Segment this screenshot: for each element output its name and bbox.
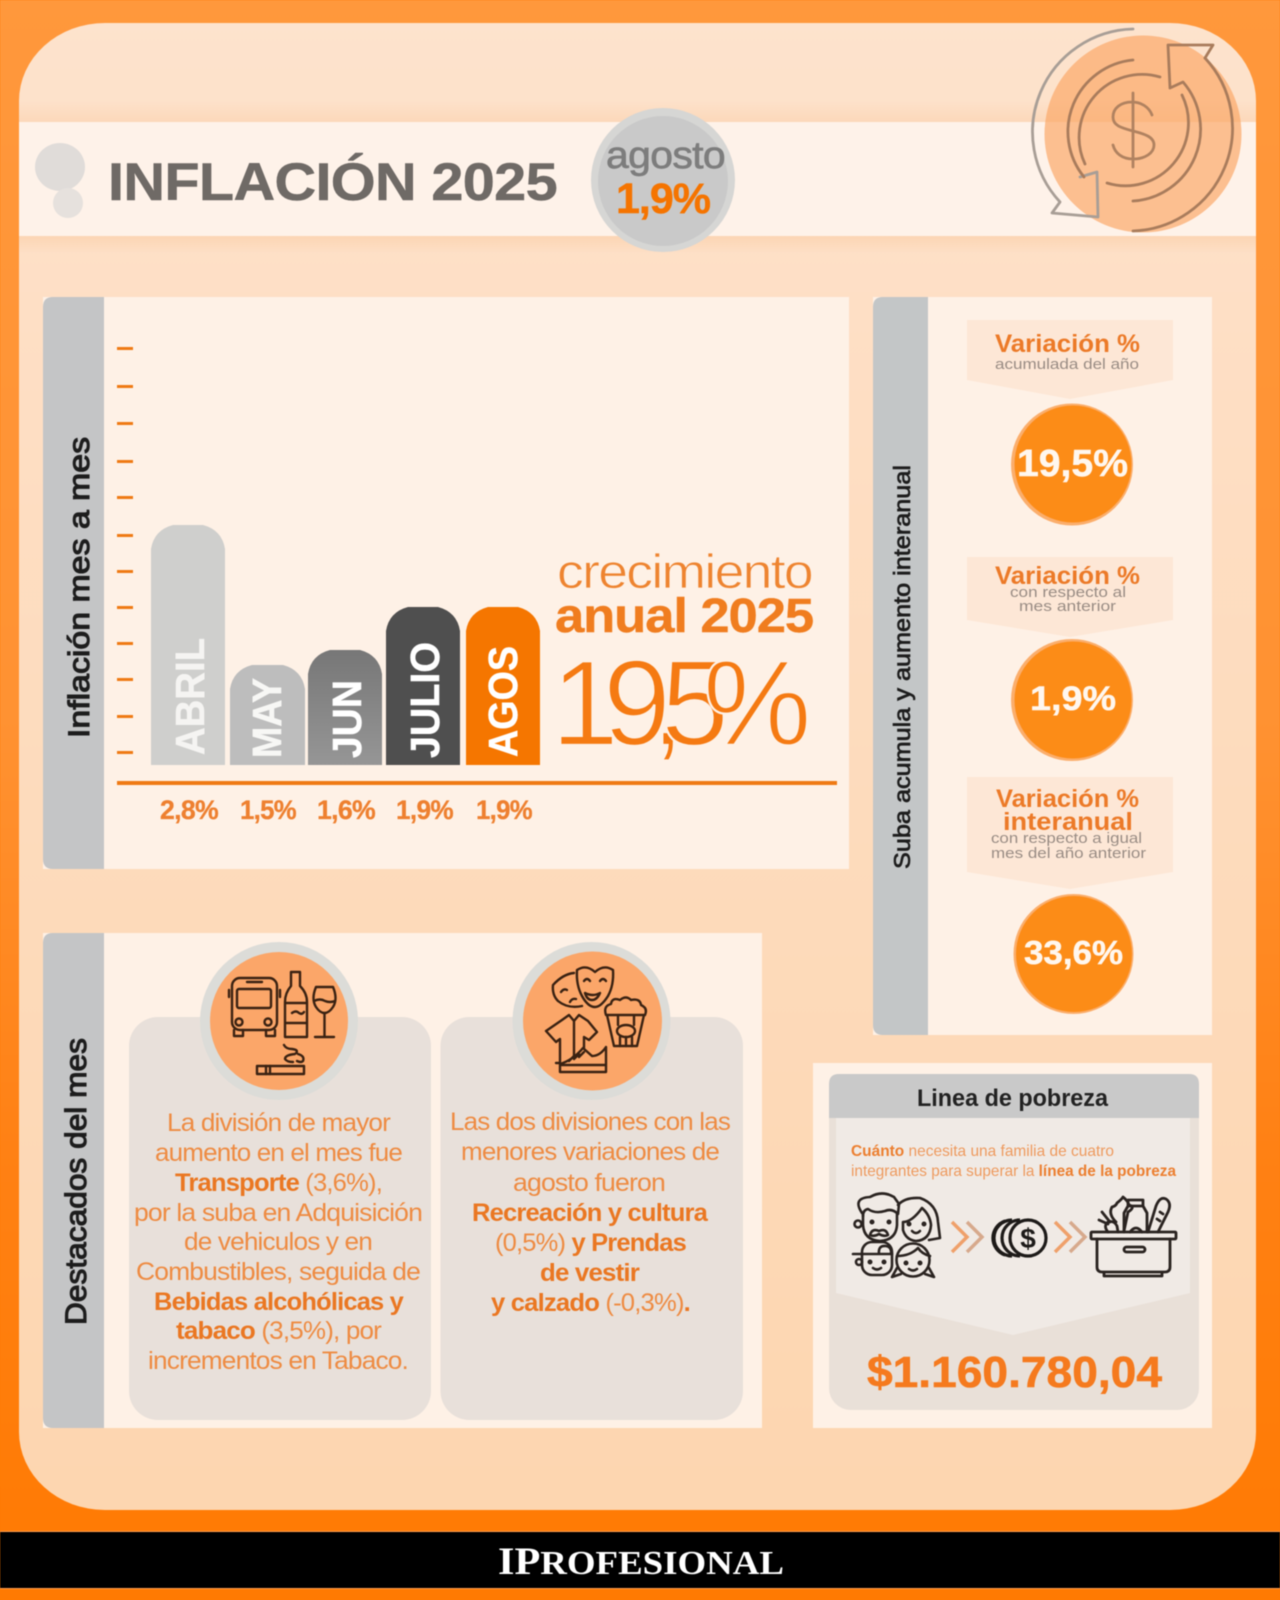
label: variación acumulada — [967, 320, 1173, 399]
label: variación acumulada: Variación % — [995, 330, 1140, 358]
badge: agosto 1,9%: 1,9% — [616, 175, 711, 223]
icon: bus, bottle, glass, cigarette — [200, 942, 358, 1100]
description — [851, 1143, 1176, 1180]
text: mayor aumento — [134, 1109, 422, 1375]
value circle: 1,9% — [1011, 639, 1133, 761]
label: variación mensual: Variación % — [995, 562, 1140, 590]
bar value labels: 2,8% — [160, 795, 219, 825]
text: mayor aumento: aumento en el mes fue — [155, 1139, 402, 1167]
bar value labels: 1,9% — [396, 795, 454, 825]
arrow: chevrons right — [1055, 1222, 1085, 1252]
amount: $1.160.780,04 — [867, 1348, 1163, 1397]
footer bar — [0, 1531, 1280, 1589]
logo text: IPROFESIONAL — [498, 1540, 784, 1583]
value circle: 19,5% — [1011, 404, 1133, 526]
value circle: 19,5%: 19,5% — [1017, 443, 1128, 485]
vertical heading: Suba acumula y aumento interanual — [889, 465, 915, 869]
annual growth callout: anual 2025 — [555, 590, 813, 643]
bar: junio: JUN — [324, 680, 370, 758]
bar: abril — [151, 525, 225, 765]
label: variación interanual: con respecto a igual — [991, 830, 1142, 847]
decorative blobs — [35, 143, 85, 218]
vertical heading: Inflación mes a mes — [63, 437, 96, 738]
icon: coins — [993, 1220, 1046, 1256]
text: menores variaciones: menores variaciones de — [461, 1138, 719, 1166]
bar: mayo: MAY — [244, 678, 290, 758]
bar: abril: ABRIL — [167, 638, 213, 755]
icon: masks, popcorn, shirt, shoe — [512, 942, 670, 1100]
bar: junio — [308, 650, 382, 765]
panel: accumulated and interannual — [873, 297, 1212, 1035]
vertical heading: Destacados del mes — [60, 1038, 93, 1325]
panel: highlights of the month — [43, 933, 762, 1428]
text: menores variaciones: (0,5%) y Prendas — [495, 1229, 686, 1257]
label: variación interanual: mes del año anterior — [991, 845, 1146, 862]
text: menores variaciones: agosto fueron — [513, 1169, 665, 1197]
bar: agosto: AGOS — [480, 646, 526, 757]
label: variación acumulada: acumulada del año — [995, 356, 1139, 373]
text: mayor aumento: Transporte (3,6%), — [175, 1169, 382, 1197]
label: variación interanual: interanual — [1003, 808, 1133, 836]
annual growth callout — [551, 546, 813, 771]
annual growth callout: 19,5% — [551, 635, 811, 771]
bar value labels: 1,6% — [317, 795, 376, 825]
icon: grocery box — [1091, 1197, 1176, 1276]
value circle: 33,6%: 33,6% — [1024, 934, 1123, 971]
bar value labels — [160, 795, 533, 825]
value circle: 33,6% — [1014, 894, 1134, 1014]
text: menores variaciones: de vestir — [540, 1259, 640, 1287]
value circle: 1,9%: 1,9% — [1030, 680, 1116, 718]
text: menores variaciones: Las dos divisiones con las — [450, 1108, 730, 1136]
text: mayor aumento: La división de mayor — [167, 1109, 390, 1137]
description: Cuánto necesita una familia de cuatro — [851, 1143, 1114, 1160]
badge: agosto 1,9%: agosto — [606, 135, 725, 177]
annual growth callout: crecimiento — [557, 546, 812, 599]
label: variación interanual — [967, 777, 1173, 889]
text: mayor aumento: tabaco (3,5%), por — [176, 1317, 381, 1345]
title: INFLACIÓN 2025 — [108, 152, 557, 212]
bar: julio — [386, 607, 460, 765]
bar: agosto — [466, 607, 540, 765]
text: menores variaciones: y calzado (-0,3%). — [491, 1289, 690, 1317]
card: mayor aumento — [129, 942, 431, 1420]
arrow: chevrons left — [952, 1222, 982, 1252]
icon: family — [853, 1194, 940, 1277]
bar: mayo — [230, 665, 305, 765]
text: mayor aumento: Bebidas alcohólicas y — [154, 1288, 404, 1316]
header band — [19, 100, 1256, 254]
label: variación mensual — [967, 557, 1173, 637]
badge: agosto 1,9% — [591, 108, 735, 252]
text: mayor aumento: de vehiculos y en — [184, 1228, 372, 1256]
axis ticks — [117, 347, 133, 754]
bar: julio: JULIO — [402, 642, 448, 758]
label: variación mensual: con respecto al — [1010, 584, 1126, 601]
text: mayor aumento: por la suba en Adquisición — [134, 1199, 422, 1227]
description: integrantes para superar la línea de la pobreza — [851, 1163, 1176, 1180]
icon: coins: $ — [1020, 1223, 1036, 1254]
bar value labels: 1,5% — [240, 795, 297, 825]
bar value labels: 1,9% — [476, 795, 533, 825]
label: variación mensual: mes anterior — [1019, 598, 1116, 615]
icon: circular money arrows — [1033, 29, 1242, 232]
panel: poverty line — [813, 1063, 1212, 1428]
baseline axis — [117, 781, 837, 785]
text: menores variaciones — [450, 1108, 730, 1317]
label: variación interanual: Variación % — [996, 785, 1139, 813]
card: menores variaciones — [440, 942, 743, 1420]
text: menores variaciones: Recreación y cultura — [472, 1199, 709, 1227]
text: mayor aumento: Combustibles, seguida de — [136, 1258, 420, 1286]
panel: monthly inflation chart — [43, 297, 849, 869]
heading: Linea de pobreza — [917, 1085, 1109, 1112]
text: mayor aumento: incrementos en Tabaco. — [148, 1347, 408, 1375]
